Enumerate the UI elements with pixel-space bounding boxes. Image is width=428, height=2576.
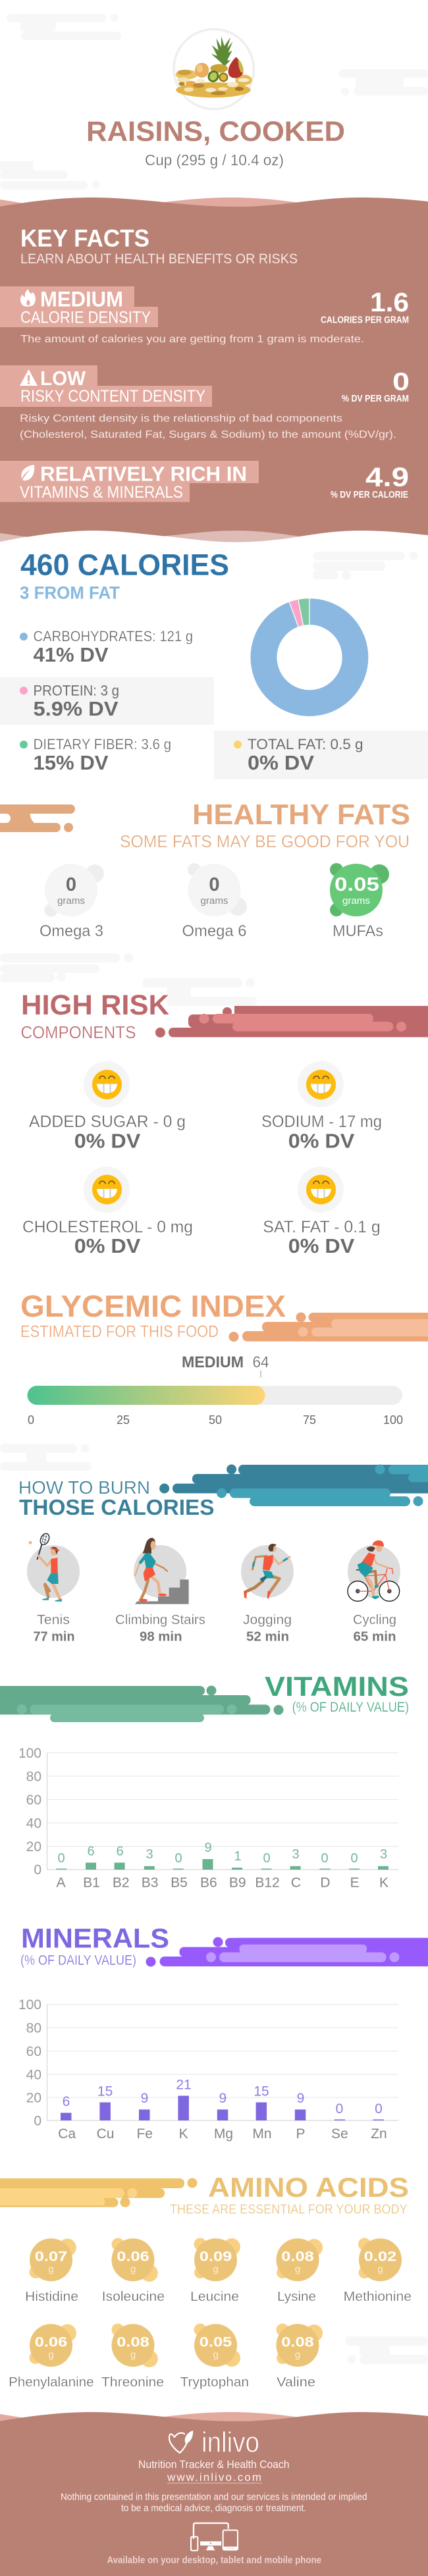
fact: calorie density: CALORIES PER GRAM <box>321 315 409 325</box>
stat: protein: 5.9% DV <box>33 697 119 720</box>
risk: saturated fat: SAT. FAT - 0.1 g <box>263 1218 381 1236</box>
heading: how to burn those calories: HOW TO BURN <box>18 1477 150 1498</box>
fact: calorie density <box>0 286 409 345</box>
icon: grinning face <box>306 1174 336 1205</box>
icon: flame <box>20 289 36 307</box>
bar chart: vitamins: 80 <box>26 1770 41 1784</box>
amino acid: histidine <box>25 2238 78 2304</box>
fat: omega 3: grams <box>57 895 85 907</box>
bar chart: vitamins: B9 <box>229 1876 246 1891</box>
risk: sodium: 0% DV <box>288 1129 355 1152</box>
brand name: inlivo <box>201 2427 259 2459</box>
heading: key facts <box>20 225 298 267</box>
bar chart: vitamins: 0 <box>350 1851 358 1866</box>
bar chart: vitamins: B5 <box>171 1876 188 1891</box>
gauge: glycemic index: 64 <box>253 1354 269 1371</box>
bar chart: minerals: 80 <box>26 2021 41 2036</box>
amino acid: histidine: g <box>48 2263 54 2274</box>
fat: omega 6: 0 <box>209 874 220 895</box>
gauge: glycemic index: 50 <box>209 1413 222 1427</box>
disclaimer: Nothing contained in this presentation and our services is intended or implied <box>61 2492 367 2503</box>
fact: vitamins and minerals: % DV PER CALORIE <box>331 490 408 500</box>
heading: vitamins: (% OF DAILY VALUE) <box>292 1700 409 1715</box>
bar chart: minerals: 9 <box>141 2091 148 2106</box>
decoration band: minerals <box>146 1937 428 1967</box>
stat: total fat: 0% DV <box>248 751 314 774</box>
amino acid: isoleucine: Isoleucine <box>102 2290 165 2304</box>
amino acid: leucine: Leucine <box>190 2290 239 2304</box>
fat: omega 6: grams <box>200 895 228 907</box>
heading: key facts: KEY FACTS <box>20 225 149 251</box>
tagline: Nutrition Tracker & Health Coach <box>138 2458 290 2471</box>
icon: grinning face <box>92 1070 122 1099</box>
bar chart: vitamins: E <box>350 1876 360 1891</box>
bar chart: minerals: 100 <box>18 1997 41 2012</box>
heading: glycemic index: ESTIMATED FOR THIS FOOD <box>20 1323 219 1341</box>
icon: food photo of dried fruit <box>174 29 254 109</box>
amino acid: methionine: g <box>377 2263 383 2274</box>
risk: cholesterol <box>22 1167 193 1257</box>
stat: carbohydrates <box>20 628 193 666</box>
stat: protein: PROTEIN: 3 g <box>33 683 119 699</box>
bar chart: minerals: Se <box>331 2126 348 2142</box>
amino acid: valine <box>277 2324 323 2390</box>
amino acid: threonine: Threonine <box>101 2375 164 2390</box>
bar chart: vitamins: 20 <box>26 1839 41 1854</box>
heading: calories: 460 CALORIES <box>20 548 229 582</box>
icon: warning triangle <box>20 369 38 386</box>
fat: MUFAs: grams <box>342 895 370 907</box>
risk: sodium <box>261 1061 382 1152</box>
icon: tennis player <box>29 1532 62 1602</box>
heading: minerals: MINERALS <box>21 1923 169 1954</box>
gauge: glycemic index: MEDIUM <box>182 1354 244 1371</box>
heading: glycemic index <box>20 1289 286 1341</box>
heading: vitamins: VITAMINS <box>265 1671 409 1702</box>
risk: added sugar: 0% DV <box>74 1129 141 1152</box>
heading: amino acids: THESE ARE ESSENTIAL FOR YOUR BODY <box>170 2203 408 2217</box>
amino acid: isoleucine: g <box>130 2263 136 2274</box>
bar chart: vitamins: 0 <box>263 1851 271 1866</box>
fact: risky content density <box>0 365 410 440</box>
risk: added sugar: ADDED SUGAR - 0 g <box>29 1113 186 1131</box>
icon: desktop tablet and phone <box>191 2523 238 2550</box>
amino acid: isoleucine <box>102 2238 165 2304</box>
risk: saturated fat: 0% DV <box>288 1234 355 1257</box>
bar chart: vitamins: 40 <box>26 1816 41 1831</box>
fact: vitamins and minerals: RELATIVELY RICH IN <box>40 462 247 486</box>
stat: dietary fiber: DIETARY FIBER: 3.6 g <box>33 736 171 752</box>
bar chart: minerals: 0 <box>336 2101 343 2116</box>
stat: carbohydrates: 41% DV <box>33 643 109 666</box>
icon: woman climbing stairs <box>135 1538 189 1604</box>
heading: calories: 3 FROM FAT <box>20 583 120 602</box>
bar chart: minerals: 15 <box>254 2084 269 2099</box>
heading: healthy fats: HEALTHY FATS <box>192 799 410 831</box>
heading: calories <box>20 548 229 602</box>
bar chart: vitamins: 0 <box>34 1862 41 1878</box>
fact: risky content density: Risky Content density is the relationship of bad components <box>20 413 342 425</box>
decoration band: healthy fats <box>0 804 75 832</box>
fact: calorie density: MEDIUM <box>40 287 123 311</box>
amino acid: lysine: 0.08 <box>281 2248 314 2264</box>
amino acid: leucine: g <box>213 2263 219 2274</box>
fact: risky content density: RISKY CONTENT DENSITY <box>20 387 205 406</box>
bar chart: minerals: Zn <box>371 2126 387 2142</box>
amino acid: valine: Valine <box>277 2375 315 2390</box>
amino acid: histidine: Histidine <box>25 2290 78 2304</box>
activity: cycling: 65 min <box>353 1630 396 1644</box>
panel: key facts <box>0 197 428 542</box>
amino acid: valine: 0.08 <box>281 2334 314 2350</box>
bar chart: vitamins: 1 <box>234 1849 242 1864</box>
bar chart: minerals: Mn <box>252 2126 272 2142</box>
stat: carbohydrates: CARBOHYDRATES: 121 g <box>33 628 193 644</box>
bar chart: vitamins: 60 <box>26 1793 41 1808</box>
bar chart: vitamins: B6 <box>200 1876 217 1891</box>
heading: healthy fats: SOME FATS MAY BE GOOD FOR YOU <box>120 831 410 851</box>
gauge: glycemic index: 25 <box>117 1413 130 1427</box>
amino acid: phenylalanine: 0.06 <box>35 2334 67 2350</box>
activity: cycling: Cycling <box>353 1613 396 1627</box>
decoration band: amino acids <box>0 2178 198 2207</box>
heading: amino acids <box>170 2172 409 2217</box>
amino acid: histidine: 0.07 <box>35 2248 67 2264</box>
activity: tennis <box>27 1532 80 1644</box>
icon: grinning face <box>92 1174 122 1205</box>
risk: added sugar <box>29 1061 186 1152</box>
bar chart: minerals: K <box>179 2126 188 2142</box>
heading: how to burn those calories: THOSE CALORIES <box>19 1495 215 1519</box>
amino acid: lysine: Lysine <box>277 2290 316 2304</box>
risk: cholesterol: 0% DV <box>74 1234 141 1257</box>
fat: omega 3: 0 <box>66 874 76 895</box>
heading: glycemic index: GLYCEMIC INDEX <box>20 1289 286 1323</box>
amino acid: methionine <box>344 2238 412 2304</box>
activity: jogging: Jogging <box>243 1613 292 1627</box>
activity: climbing stairs: Climbing Stairs <box>115 1613 205 1627</box>
amino acid: lysine <box>277 2238 323 2304</box>
amino acid: methionine: 0.02 <box>364 2248 396 2264</box>
gauge: glycemic index: 100 <box>383 1413 403 1427</box>
amino acid: leucine <box>190 2238 240 2304</box>
bar chart: minerals: 20 <box>26 2091 41 2105</box>
fact: calorie density: CALORIE DENSITY <box>20 308 151 327</box>
gauge: glycemic index: 0 <box>28 1413 34 1427</box>
bar chart: vitamins <box>18 1746 398 1891</box>
decoration band: burn calories <box>159 1464 428 1506</box>
heading: vitamins <box>265 1671 409 1715</box>
activity: tennis: Tenis <box>37 1613 70 1627</box>
amino acid: threonine <box>101 2324 164 2390</box>
bar chart: minerals: 40 <box>26 2067 41 2083</box>
icon: jogger <box>244 1544 290 1599</box>
amino acid: lysine: g <box>295 2263 300 2274</box>
gauge: glycemic index <box>28 1354 403 1427</box>
stat: protein <box>0 677 214 725</box>
bar chart: minerals: Cu <box>97 2126 114 2142</box>
fat: omega 6 <box>182 863 247 940</box>
activity: tennis: 77 min <box>33 1630 75 1644</box>
bar chart: minerals: 0 <box>375 2101 383 2116</box>
risk: cholesterol: CHOLESTEROL - 0 mg <box>22 1218 193 1236</box>
fat: omega 6: Omega 6 <box>182 922 246 940</box>
disclaimer: to be a medical advice, diagnosis or treatment. <box>121 2504 306 2514</box>
stat: total fat <box>214 731 428 779</box>
bar chart: minerals: 6 <box>63 2094 70 2109</box>
donut chart: calorie sources <box>250 598 369 716</box>
fact: vitamins and minerals: VITAMINS & MINERALS <box>20 483 183 502</box>
amino acid: leucine: 0.09 <box>200 2248 232 2264</box>
fat: omega 3 <box>40 864 104 940</box>
fat: MUFAs: MUFAs <box>333 922 383 940</box>
fact: risky content density: (Cholesterol, Saturated Fat, Sugars & Sodium) to the amount (%DV/gr). <box>20 429 396 440</box>
bar chart: minerals: 0 <box>34 2113 41 2129</box>
bar chart: vitamins: 0 <box>174 1851 182 1866</box>
bar chart: vitamins: 3 <box>292 1847 300 1862</box>
availability note: Available on your desktop, tablet and mobile phone <box>107 2556 321 2566</box>
icon: grinning face <box>306 1070 336 1099</box>
bar chart: minerals: 15 <box>97 2084 113 2099</box>
subtitle: serving size: Cup (295 g / 10.4 oz) <box>145 151 284 169</box>
amino acid: valine: g <box>295 2349 300 2360</box>
icon: leaf <box>21 465 34 481</box>
bar chart: vitamins: 6 <box>116 1845 124 1859</box>
footer panel <box>0 2412 428 2576</box>
heading: high risk: COMPONENTS <box>21 1022 136 1042</box>
fact: calorie density: The amount of calories you are getting from 1 gram is moderate. <box>20 334 364 345</box>
fact: vitamins and minerals <box>0 461 409 502</box>
disclaimer <box>61 2492 367 2514</box>
bar chart: vitamins: B12 <box>255 1876 280 1891</box>
activity: cycling <box>348 1540 400 1644</box>
amino acid: threonine: g <box>130 2349 136 2360</box>
heading: how to burn those calories <box>18 1477 215 1519</box>
heading: healthy fats <box>120 799 410 851</box>
heading: amino acids: AMINO ACIDS <box>208 2172 409 2203</box>
fat: MUFAs <box>330 863 389 940</box>
bar chart: minerals: Mg <box>214 2126 233 2142</box>
amino acid: phenylalanine: Phenylalanine <box>9 2375 94 2390</box>
bar chart: vitamins: A <box>56 1876 66 1891</box>
heading: minerals <box>20 1923 169 1968</box>
bar chart: vitamins: 3 <box>146 1847 153 1862</box>
fat: omega 3: Omega 3 <box>40 922 103 940</box>
website link: www.inlivo.com <box>167 2471 261 2483</box>
bar chart: vitamins: B2 <box>113 1876 130 1891</box>
stat: dietary fiber <box>20 736 171 774</box>
bar chart: minerals: 60 <box>26 2044 41 2059</box>
decoration band: glycemic index <box>229 1313 428 1342</box>
bar chart: vitamins: B1 <box>83 1876 100 1891</box>
title: RAISINS, COOKED <box>86 116 345 147</box>
stat: total fat: TOTAL FAT: 0.5 g <box>248 736 363 752</box>
bar chart: vitamins: 6 <box>87 1845 95 1859</box>
decoration band: high risk <box>155 1006 428 1038</box>
bar chart: minerals: Fe <box>136 2126 153 2142</box>
amino acid: methionine: Methionine <box>344 2290 412 2304</box>
amino acid: tryptophan: 0.05 <box>200 2334 232 2350</box>
bar chart: vitamins: 100 <box>18 1746 41 1761</box>
bar chart: vitamins: K <box>379 1876 388 1891</box>
amino acid: threonine: 0.08 <box>117 2334 149 2350</box>
amino acid: phenylalanine <box>9 2324 94 2390</box>
bar chart: vitamins: 0 <box>57 1851 65 1866</box>
bar chart: minerals: 9 <box>297 2091 304 2106</box>
bar chart: vitamins: D <box>320 1876 331 1891</box>
fact: risky content density: LOW <box>40 367 86 390</box>
gauge: glycemic index: 75 <box>303 1413 316 1427</box>
stat: dietary fiber: 15% DV <box>33 751 109 774</box>
amino acid: tryptophan: g <box>213 2349 219 2360</box>
heading: key facts: LEARN ABOUT HEALTH BENEFITS OR RISKS <box>20 251 298 267</box>
heading: minerals: (% OF DAILY VALUE) <box>20 1953 136 1968</box>
amino acid: tryptophan: Tryptophan <box>180 2375 249 2390</box>
logo: heart and leaf <box>169 2431 193 2453</box>
fact: vitamins and minerals: 4.9 <box>365 462 409 492</box>
bar chart: minerals: 21 <box>176 2078 192 2092</box>
bar chart: vitamins: 9 <box>204 1841 212 1855</box>
bar chart: minerals: Ca <box>58 2126 76 2142</box>
bar chart: vitamins: B3 <box>142 1876 158 1891</box>
risk: sodium: SODIUM - 17 mg <box>261 1113 382 1131</box>
heading: high risk <box>21 989 169 1042</box>
activity: jogging: 52 min <box>246 1630 289 1644</box>
fat: MUFAs: 0.05 <box>334 874 379 895</box>
activity: climbing stairs <box>115 1538 205 1644</box>
icon: cyclist <box>348 1540 400 1601</box>
amino acid: isoleucine: 0.06 <box>117 2248 149 2264</box>
risk: saturated fat <box>263 1167 381 1257</box>
activity: jogging <box>241 1544 294 1644</box>
bar chart: minerals: P <box>296 2126 306 2142</box>
amino acid: phenylalanine: g <box>48 2349 54 2360</box>
bar chart: minerals <box>18 1997 398 2142</box>
amino acid: tryptophan <box>180 2324 249 2390</box>
fact: risky content density: % DV PER GRAM <box>342 394 409 404</box>
activity: climbing stairs: 98 min <box>140 1630 182 1644</box>
bar chart: vitamins: 3 <box>380 1847 387 1862</box>
fact: risky content density: 0 <box>392 369 410 396</box>
bar chart: vitamins: 0 <box>321 1851 329 1866</box>
heading: high risk: HIGH RISK <box>21 989 169 1021</box>
decoration band: vitamins <box>0 1685 283 1722</box>
bar chart: minerals: 9 <box>219 2091 227 2106</box>
bar chart: vitamins: C <box>291 1876 301 1891</box>
fact: calorie density: 1.6 <box>370 287 409 317</box>
